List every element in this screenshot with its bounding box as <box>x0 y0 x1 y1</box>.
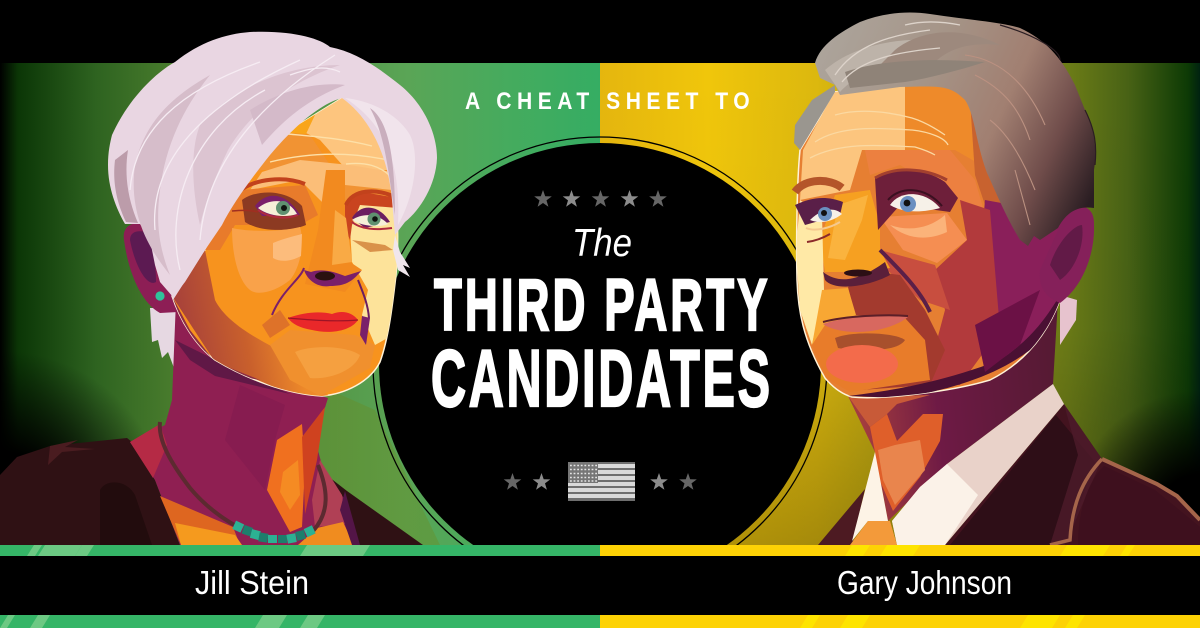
decorative stars and flag below title <box>504 462 697 501</box>
green name band: bottom stripe <box>0 615 600 628</box>
background panel: yellow side <box>600 63 1200 545</box>
forehead wrinkles <box>270 134 392 178</box>
hair <box>794 13 1096 246</box>
title: Third Party: THIRD PARTY <box>434 264 768 346</box>
candidate name: Gary Johnson: Gary Johnson <box>837 564 1012 601</box>
necktie <box>850 521 897 545</box>
shirt collar <box>852 384 1064 545</box>
necklace <box>160 422 326 544</box>
neck <box>130 300 355 545</box>
icon: American flag <box>568 462 635 501</box>
forehead wrinkles <box>810 111 948 158</box>
portrait: Jill Stein <box>0 32 437 545</box>
neck highlights <box>130 340 345 532</box>
decorative stars above title <box>534 190 667 207</box>
title: The: The <box>572 222 632 265</box>
jacket <box>0 438 423 545</box>
central black circle with thin ring <box>373 137 827 591</box>
neck highlights <box>848 395 943 511</box>
nose, creases and mouth <box>272 268 370 345</box>
hair behind neck <box>150 308 176 368</box>
suit jacket <box>818 404 1200 545</box>
yellow name band: bottom stripe <box>600 615 1200 628</box>
nose and mouth <box>823 250 930 332</box>
chest and shirt <box>160 491 360 545</box>
kicker text: A CHEAT SHEET TO <box>465 86 750 114</box>
background panel: green side <box>0 63 600 545</box>
ear and earring <box>124 223 178 313</box>
candidate name: Jill Stein: Jill Stein <box>195 564 309 601</box>
neck <box>848 300 1058 521</box>
ear <box>1050 208 1094 303</box>
face <box>796 84 1066 398</box>
hair <box>108 32 437 300</box>
brows, eyes <box>795 170 958 242</box>
yellow name band: top stripe <box>600 545 1200 556</box>
portrait: Gary Johnson <box>794 13 1200 545</box>
title: Candidates: CANDIDATES <box>431 334 770 424</box>
brows and eyes <box>232 179 397 229</box>
white hair behind ear <box>1060 295 1077 345</box>
face <box>172 96 398 398</box>
green name band: top stripe <box>0 545 600 556</box>
